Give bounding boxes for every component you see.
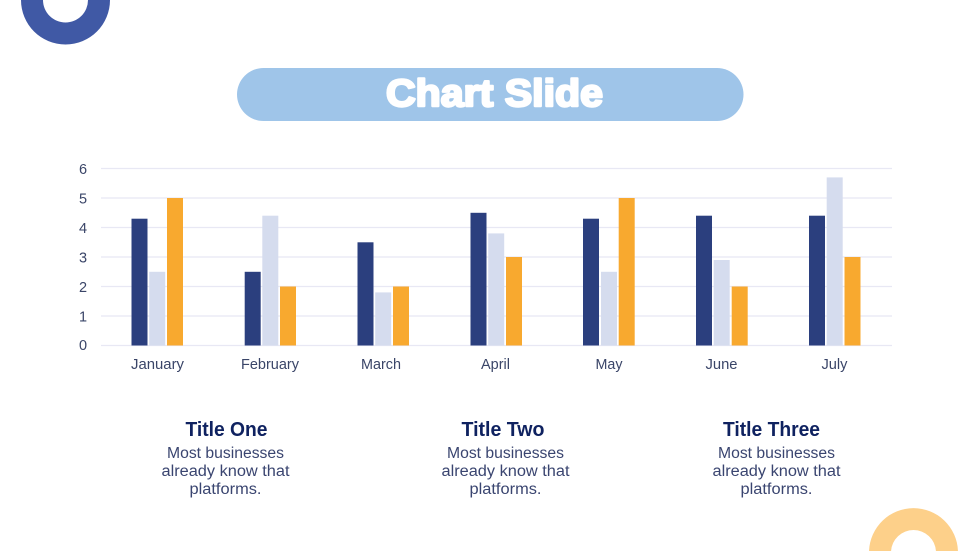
bars: March bbox=[358, 242, 409, 346]
x axis labels: June bbox=[706, 357, 738, 373]
y axis labels: 3 bbox=[79, 250, 87, 266]
x axis labels bbox=[131, 357, 848, 373]
title pill bbox=[237, 68, 744, 121]
text block: Title Two: already know that bbox=[442, 463, 570, 480]
y axis labels bbox=[79, 162, 87, 354]
text block: Title One: platforms. bbox=[190, 481, 262, 498]
text block: Title Three: Title Three bbox=[723, 419, 820, 441]
icon: light orange ring, bottom right bbox=[869, 508, 958, 551]
bar chart bbox=[79, 162, 892, 373]
x axis labels: February bbox=[241, 357, 300, 373]
x axis labels: July bbox=[822, 357, 848, 373]
bars: July bbox=[809, 177, 860, 346]
y axis labels: 6 bbox=[79, 162, 87, 178]
icon: blue ring, top left bbox=[21, 0, 110, 44]
title: Chart Slide bbox=[386, 73, 603, 115]
text block: Title Two: platforms. bbox=[470, 481, 542, 498]
x axis labels: April bbox=[481, 357, 510, 373]
text block: Title Three: already know that bbox=[712, 463, 841, 480]
y axis labels: 2 bbox=[79, 280, 87, 296]
text block: Title Three: Most businesses bbox=[718, 445, 835, 462]
text block: Title Two bbox=[442, 419, 570, 498]
bars: February bbox=[245, 216, 296, 346]
text block: Title One: already know that bbox=[162, 463, 290, 480]
bars: May bbox=[583, 198, 635, 346]
text block: Title Two: Title Two bbox=[462, 419, 544, 441]
text block: Title Three bbox=[712, 419, 841, 498]
text block: Title One: Title One bbox=[186, 419, 268, 441]
y axis labels: 4 bbox=[79, 221, 87, 237]
x axis labels: May bbox=[596, 357, 623, 373]
text block: Title Three: platforms. bbox=[740, 481, 812, 498]
x axis labels: March bbox=[361, 357, 401, 373]
text block: Title Two: Most businesses bbox=[447, 445, 564, 462]
x axis labels: January bbox=[131, 357, 185, 373]
y axis labels: 0 bbox=[79, 338, 87, 354]
bars: June bbox=[696, 216, 748, 346]
y axis labels: 1 bbox=[79, 310, 87, 326]
y axis labels: 5 bbox=[79, 192, 87, 208]
bars: January bbox=[132, 198, 183, 346]
bars: April bbox=[470, 213, 522, 346]
text block: Title One: Most businesses bbox=[167, 445, 284, 462]
text block: Title One bbox=[162, 419, 290, 498]
